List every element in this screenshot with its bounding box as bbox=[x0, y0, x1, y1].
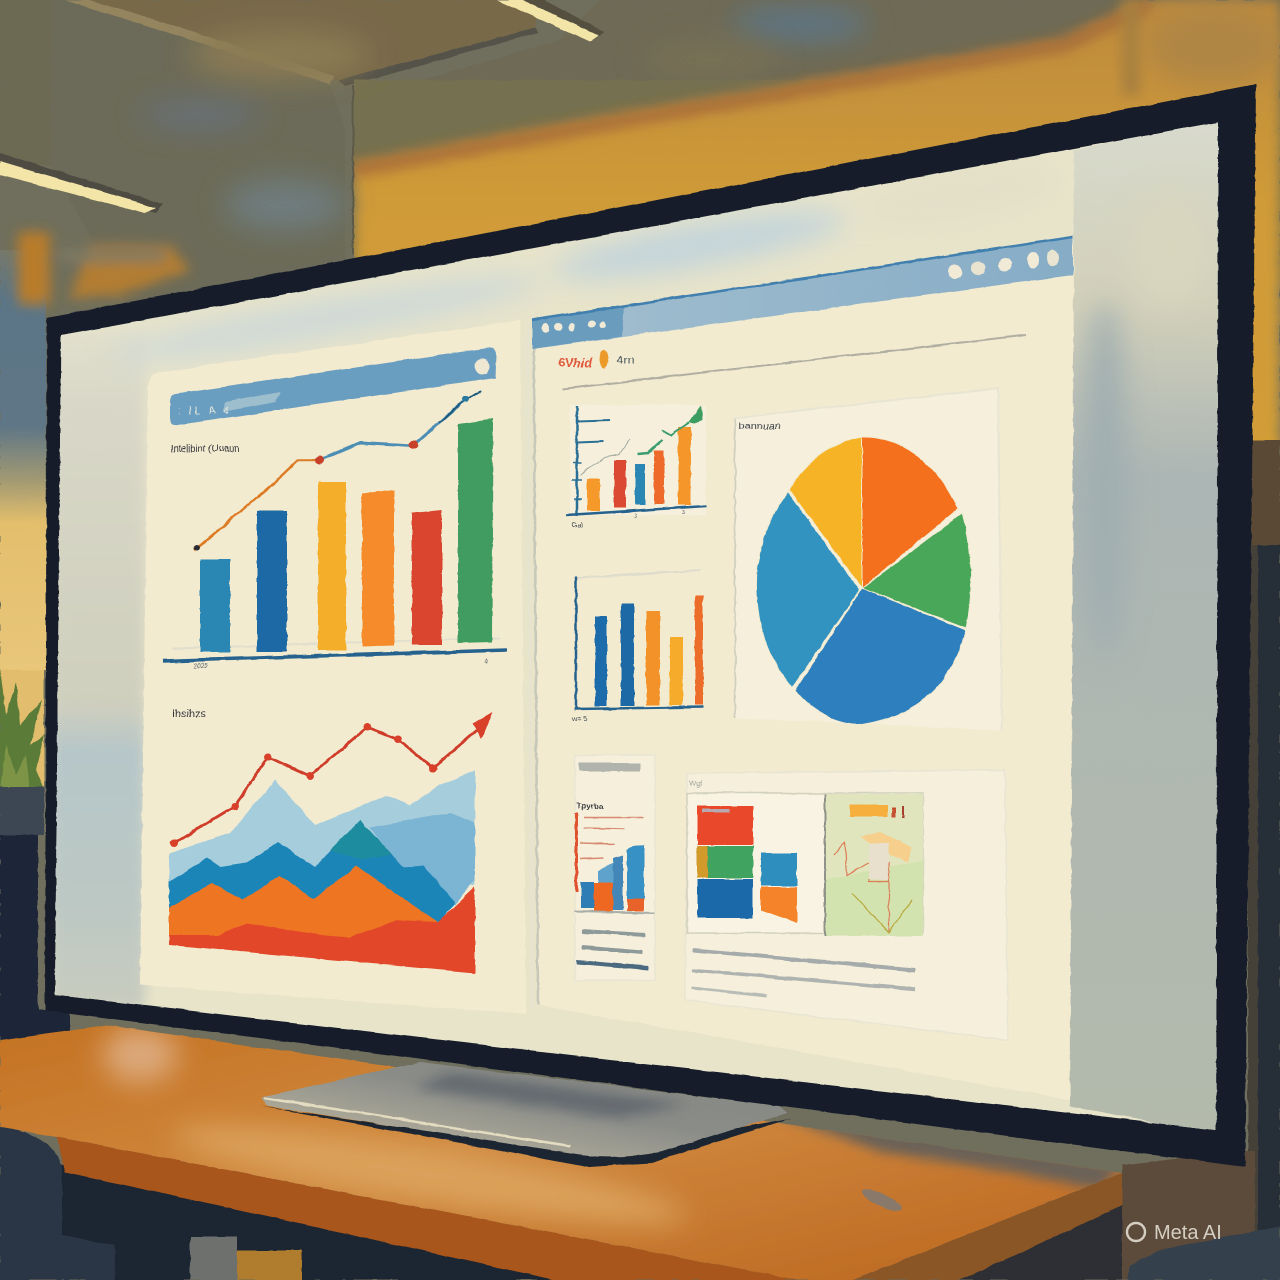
chart axis labels bbox=[194, 660, 488, 670]
report card large bbox=[685, 770, 1008, 1040]
area chart bbox=[169, 771, 475, 973]
small combo chart: Gal bbox=[571, 522, 582, 529]
panel heading: 4rn bbox=[616, 355, 634, 366]
report card small: Tpyrba bbox=[576, 802, 605, 811]
left panel title bar: : lL A 4 bbox=[178, 406, 232, 417]
pie label: bannuan bbox=[738, 421, 781, 431]
small bar chart: w= 5 bbox=[571, 716, 587, 723]
monitor stand base bbox=[261, 1062, 792, 1167]
potted plant bbox=[0, 668, 44, 1015]
ceiling light top bbox=[497, 0, 604, 42]
small bar chart bbox=[571, 570, 704, 723]
area chart label: Ihsihzs bbox=[172, 709, 206, 720]
report card large: Wgf bbox=[689, 781, 702, 788]
right chair bbox=[1127, 1226, 1280, 1280]
right side background and chair bbox=[1248, 440, 1280, 1280]
left dashboard panel bbox=[140, 320, 532, 1014]
small combo chart: 3 bbox=[634, 513, 637, 519]
ceiling light left bbox=[0, 153, 163, 213]
left chair bbox=[0, 1127, 115, 1280]
small combo chart: 3 bbox=[682, 510, 685, 516]
chart axis labels: 4 bbox=[484, 660, 488, 666]
right panel title bar bbox=[532, 237, 1073, 349]
red trend line with arrow bbox=[170, 712, 493, 847]
watermark: Meta AI: Meta AI bbox=[1154, 1222, 1222, 1244]
desk bbox=[0, 1025, 1122, 1280]
chart axis labels: 2025 bbox=[194, 664, 208, 670]
right dashboard panel bbox=[532, 237, 1074, 1100]
pie chart panel bbox=[735, 388, 1002, 730]
panel heading: 6Vhid bbox=[558, 355, 593, 370]
small combo chart bbox=[567, 405, 707, 529]
trend line over bars bbox=[194, 391, 480, 551]
pie chart bbox=[756, 437, 971, 725]
panel heading bbox=[558, 350, 634, 370]
chart label: Intelibint (Uuaun bbox=[171, 444, 239, 455]
report card small bbox=[575, 755, 655, 980]
map thumbnail bbox=[825, 794, 923, 936]
monitor screen bbox=[50, 120, 1220, 1140]
left panel title bar bbox=[170, 348, 496, 425]
bar chart bbox=[163, 419, 507, 661]
under desk background bbox=[0, 1010, 1255, 1280]
